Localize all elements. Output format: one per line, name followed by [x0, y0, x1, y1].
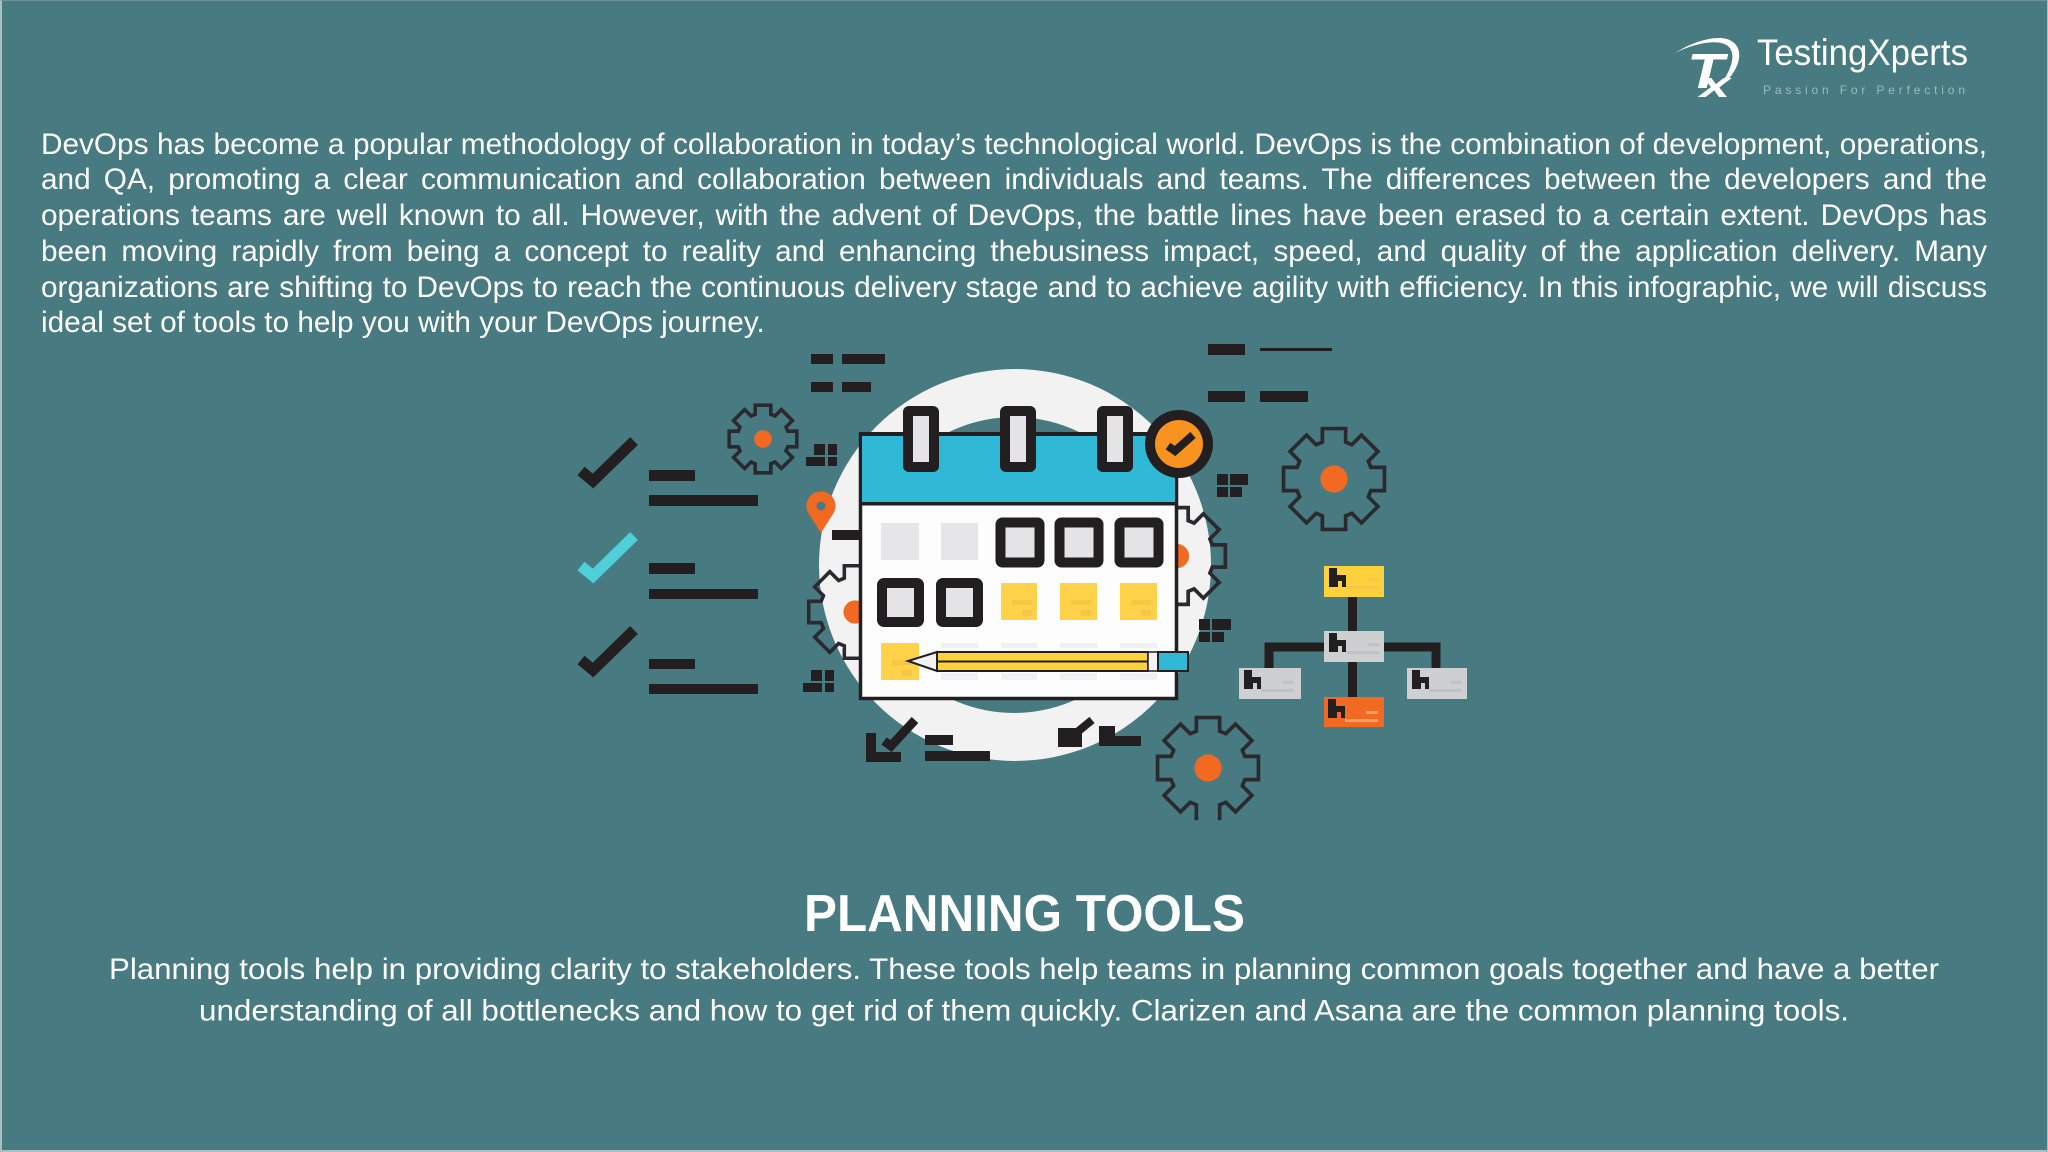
dashes top-right — [1208, 344, 1332, 402]
intro paragraph — [41, 128, 1987, 339]
description line 2: understanding of all bottlenecks and how to get rid of them quickly. Clarizen and Asana are the common planning tools. — [199, 994, 1849, 1028]
gear large bottom — [1158, 718, 1258, 822]
location pin — [806, 491, 836, 533]
block icon lower-left — [803, 670, 834, 692]
gear left behind calendar — [809, 566, 901, 658]
logo: TestingXperts — [1675, 32, 1968, 105]
intro paragraph: ideal set of tools to help you with your DevOps journey. — [41, 306, 765, 339]
org box orange — [1324, 697, 1384, 727]
gear large right — [1284, 429, 1384, 529]
check mark 3 — [581, 630, 634, 670]
org box gray centre — [1324, 631, 1384, 662]
check mark 2 — [581, 536, 634, 576]
binding peg 2 — [1000, 406, 1036, 472]
pencil — [908, 652, 1188, 671]
intro paragraph: DevOps has become a popular methodology of collaboration in today’s technological world. DevOps is the combination of development, operations, — [41, 128, 1987, 160]
intro paragraph: organizations are shifting to DevOps to reach the continuous delivery stage and to achieve agility with efficiency. In this infographic, we will discuss — [41, 271, 1987, 304]
logo wordmark: TestingXperts — [1757, 32, 1968, 73]
org box yellow — [1324, 566, 1384, 597]
check badge — [1145, 410, 1213, 478]
heading: planning tools: PLANNING TOOLS — [804, 885, 1245, 943]
logo emblem swoosh — [1675, 38, 1739, 90]
description line 1: Planning tools help in providing clarity to stakeholders. These tools help teams in planning common goals together and have a better — [109, 953, 1939, 986]
binding peg 3 — [1097, 406, 1133, 472]
stub bar left of calendar — [832, 530, 860, 540]
block icon lower-right — [1199, 619, 1231, 642]
intro paragraph: operations teams are well known to all. However, with the advent of DevOps, the battle lines have been erased to a certain extent. DevOps has — [41, 199, 1987, 232]
bottom-right check note — [1058, 720, 1141, 747]
description text — [109, 953, 1939, 1028]
calendar — [859, 406, 1213, 698]
block icon upper-right — [1217, 474, 1248, 497]
logo emblem T: T — [1687, 45, 1729, 99]
calendar row 2 cells — [882, 583, 1157, 622]
check mark 1 — [581, 441, 634, 481]
calendar row 1 cells — [881, 522, 1158, 562]
intro paragraph: and QA, promoting a clear communication and collaboration between individuals and teams. The differences between the developers and the — [41, 163, 1987, 196]
logo tagline: Passion For Perfection — [1763, 83, 1965, 97]
gear small top-left — [729, 405, 797, 473]
calendar row 3 cells — [881, 643, 1174, 680]
gear right behind calendar — [1129, 508, 1225, 604]
checklist top-left — [581, 441, 758, 694]
org box gray left — [1239, 668, 1301, 699]
dashes top-left — [811, 354, 885, 392]
illustration: calendar planning scene — [581, 344, 1467, 822]
binding peg 1 — [903, 406, 939, 472]
calendar header — [862, 436, 1175, 502]
calendar top line — [859, 432, 1179, 436]
calendar body — [860, 434, 1176, 698]
intro paragraph: been moving rapidly from being a concept to reality and enhancing thebusiness impact, speed, and quality of the application delivery. Many — [41, 235, 1987, 268]
white ring background — [819, 369, 1211, 761]
logo emblem x: x — [1697, 64, 1733, 105]
org chart connectors — [1269, 597, 1436, 697]
bottom-left check note — [866, 720, 990, 762]
block icon upper-left — [806, 444, 837, 466]
org chart — [1239, 566, 1467, 727]
checklist bars — [649, 470, 758, 694]
org box gray right — [1407, 668, 1467, 699]
